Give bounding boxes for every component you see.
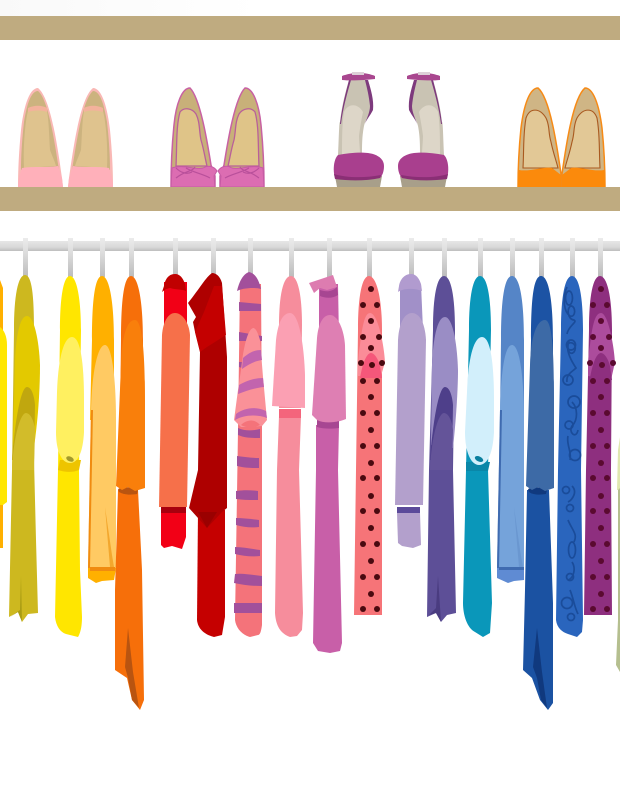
garment: blue dress with swirl pattern [556, 276, 583, 637]
garment: red and coral shirt [159, 274, 190, 549]
garment: mid blue shirt [497, 276, 524, 583]
top shelf [0, 16, 620, 40]
garment: cropped yellow top at left edge [0, 280, 7, 548]
garment: navy sweater [523, 276, 554, 710]
clothes rail [0, 241, 620, 251]
garment: polka dot dress [354, 276, 385, 615]
shoes: pale pink pumps [18, 88, 113, 187]
hangers [23, 238, 603, 277]
garment: lavender shirt [395, 274, 426, 548]
garment: plum polka dot dress [584, 276, 616, 615]
plum dots [587, 286, 616, 612]
garment: striped sweater [234, 272, 267, 637]
garment: crimson jacket [188, 273, 227, 637]
garment: sage item at right edge [616, 437, 620, 672]
garment: orange sweater [115, 276, 145, 710]
garment: amber shirt [88, 276, 116, 583]
garment: purple dress [427, 276, 458, 622]
garment: magenta sweater [309, 275, 346, 653]
shoes: orange pumps [518, 88, 605, 187]
garment: pink top [272, 276, 305, 637]
garment: olive dress [9, 275, 40, 622]
garment: yellow shirt [55, 276, 84, 637]
shoes: pink bow pumps [171, 88, 264, 187]
garment: teal shirt with pale blue sleeve [463, 276, 494, 637]
polka dots [358, 286, 385, 612]
swirl loops [562, 291, 580, 620]
shoes: purple ankle-strap heels [334, 72, 448, 187]
lower shelf [0, 187, 620, 211]
